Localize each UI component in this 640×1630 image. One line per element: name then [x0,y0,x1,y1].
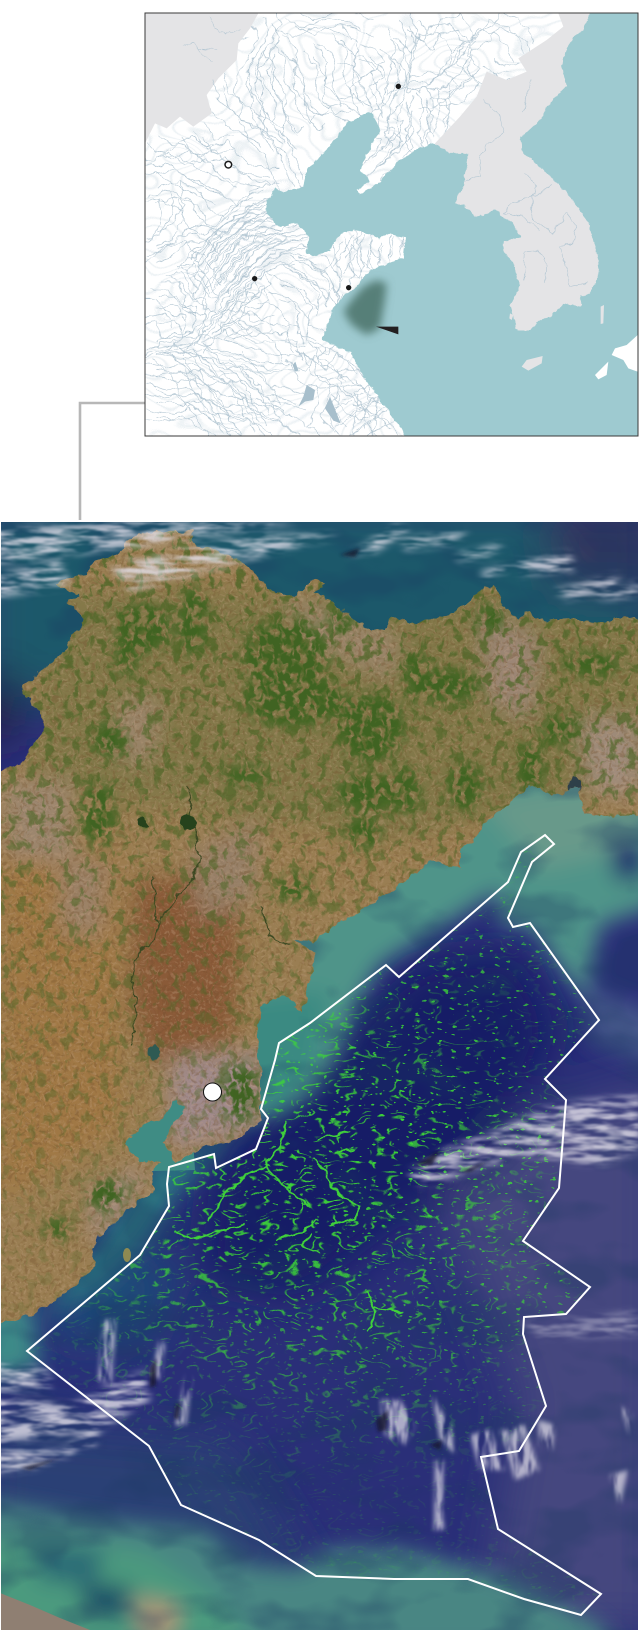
small island [123,1248,131,1262]
sediment plumes [0,760,640,1630]
locator map panel [135,7,640,442]
city marker [204,1083,222,1101]
dense river texture [146,14,561,436]
regional land tones [0,590,640,1250]
Korean islands [509,305,604,330]
vegetation patches [43,585,622,1240]
reservoirs and rivers [131,786,290,1046]
algae bloom strands [30,899,598,1609]
land mass [0,522,640,1342]
capital marker [225,161,232,168]
satellite image panel [0,500,640,1630]
cloud shadows [20,548,490,1470]
city dots [252,84,401,290]
map frame [145,13,638,436]
monitored area outline [27,835,601,1615]
Mongolia landmass [145,13,258,143]
water base [0,522,640,1630]
connector line between locator map and satellite image [80,403,145,520]
Jeju island [522,356,543,371]
arrow pointer [376,327,398,334]
algae bloom main strands [175,1122,404,1330]
clouds [0,522,640,1530]
sea [267,7,640,440]
water colour regions [0,500,640,1630]
Korean peninsula landmass [435,14,600,331]
additional tributaries [146,14,534,436]
water swirls [0,522,640,1630]
Japan islands [595,335,638,379]
land mottling [0,522,640,1342]
algae bloom shading [343,280,387,335]
river network [147,17,587,433]
Jiaozhou bay [125,1100,195,1171]
vegetation texture [0,522,640,1342]
algae bloom scattered flecks [29,850,594,1614]
bottom-left shoreline [0,1593,90,1630]
lakes [293,362,341,423]
